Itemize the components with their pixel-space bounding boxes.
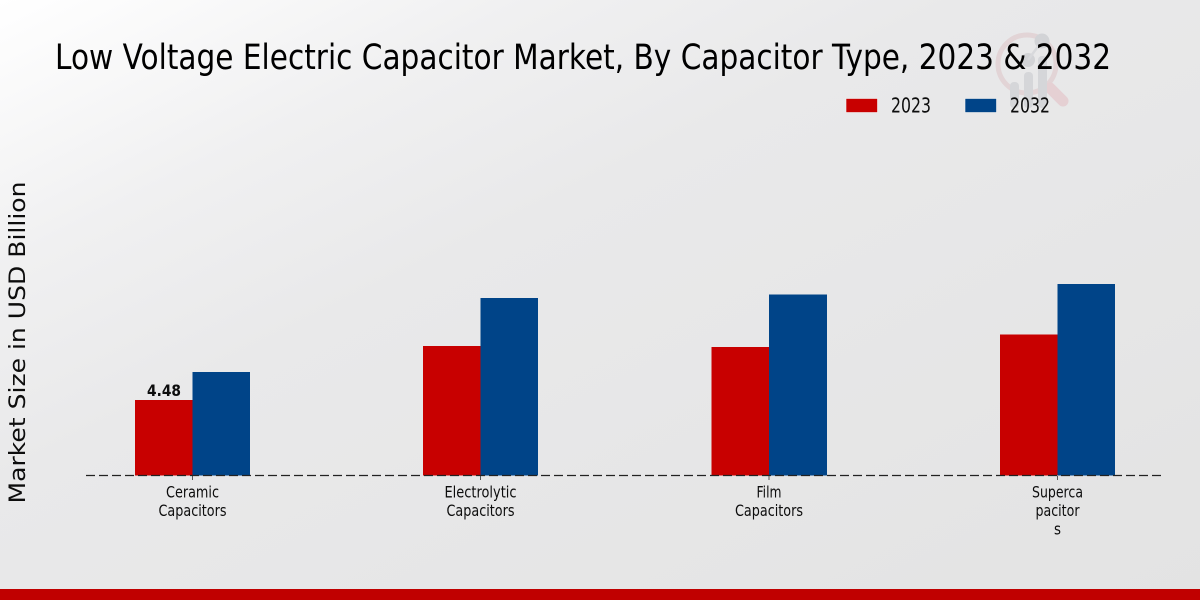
footer bar xyxy=(0,589,1200,600)
axis label: Ceramic Capacitors xyxy=(158,482,226,520)
group: Electrolytic Capacitors xyxy=(423,298,538,476)
group: Supercapacitors xyxy=(1000,284,1115,476)
axis label: Film Capacitors xyxy=(735,482,803,520)
y-axis label: Market Size in USD Billion xyxy=(5,182,31,504)
data label: 4.48: 4.48 xyxy=(147,381,181,400)
axis label: Supercapacitors xyxy=(1032,482,1083,538)
axis label: Supercapacitors: Superca xyxy=(1032,482,1083,502)
icon: watermark logo xyxy=(998,34,1063,108)
legend item: 2032: 2032 xyxy=(1010,94,1050,118)
axis label: Supercapacitors: pacitor xyxy=(1036,501,1080,520)
legend item: 2032 xyxy=(965,94,1050,118)
axis label: Ceramic Capacitors: Ceramic xyxy=(166,482,219,502)
axis label: Supercapacitors: s xyxy=(1054,520,1061,538)
axis label: Ceramic Capacitors: Capacitors xyxy=(158,501,226,520)
axis label: Film Capacitors: Capacitors xyxy=(735,501,803,520)
axis label: Film Capacitors: Film xyxy=(756,482,782,502)
legend item: 2023 xyxy=(846,94,931,118)
group: Film Capacitors xyxy=(712,294,827,476)
x-axis baseline xyxy=(86,476,1164,480)
legend xyxy=(846,94,1050,118)
legend item: 2023: 2023 xyxy=(891,94,931,118)
axis label: Electrolytic Capacitors: Electrolytic xyxy=(444,482,516,502)
axis label: Electrolytic Capacitors xyxy=(444,482,516,520)
group: Ceramic Capacitors xyxy=(135,372,250,476)
bar chart xyxy=(135,284,1115,476)
axis label: Electrolytic Capacitors: Capacitors xyxy=(446,501,514,520)
